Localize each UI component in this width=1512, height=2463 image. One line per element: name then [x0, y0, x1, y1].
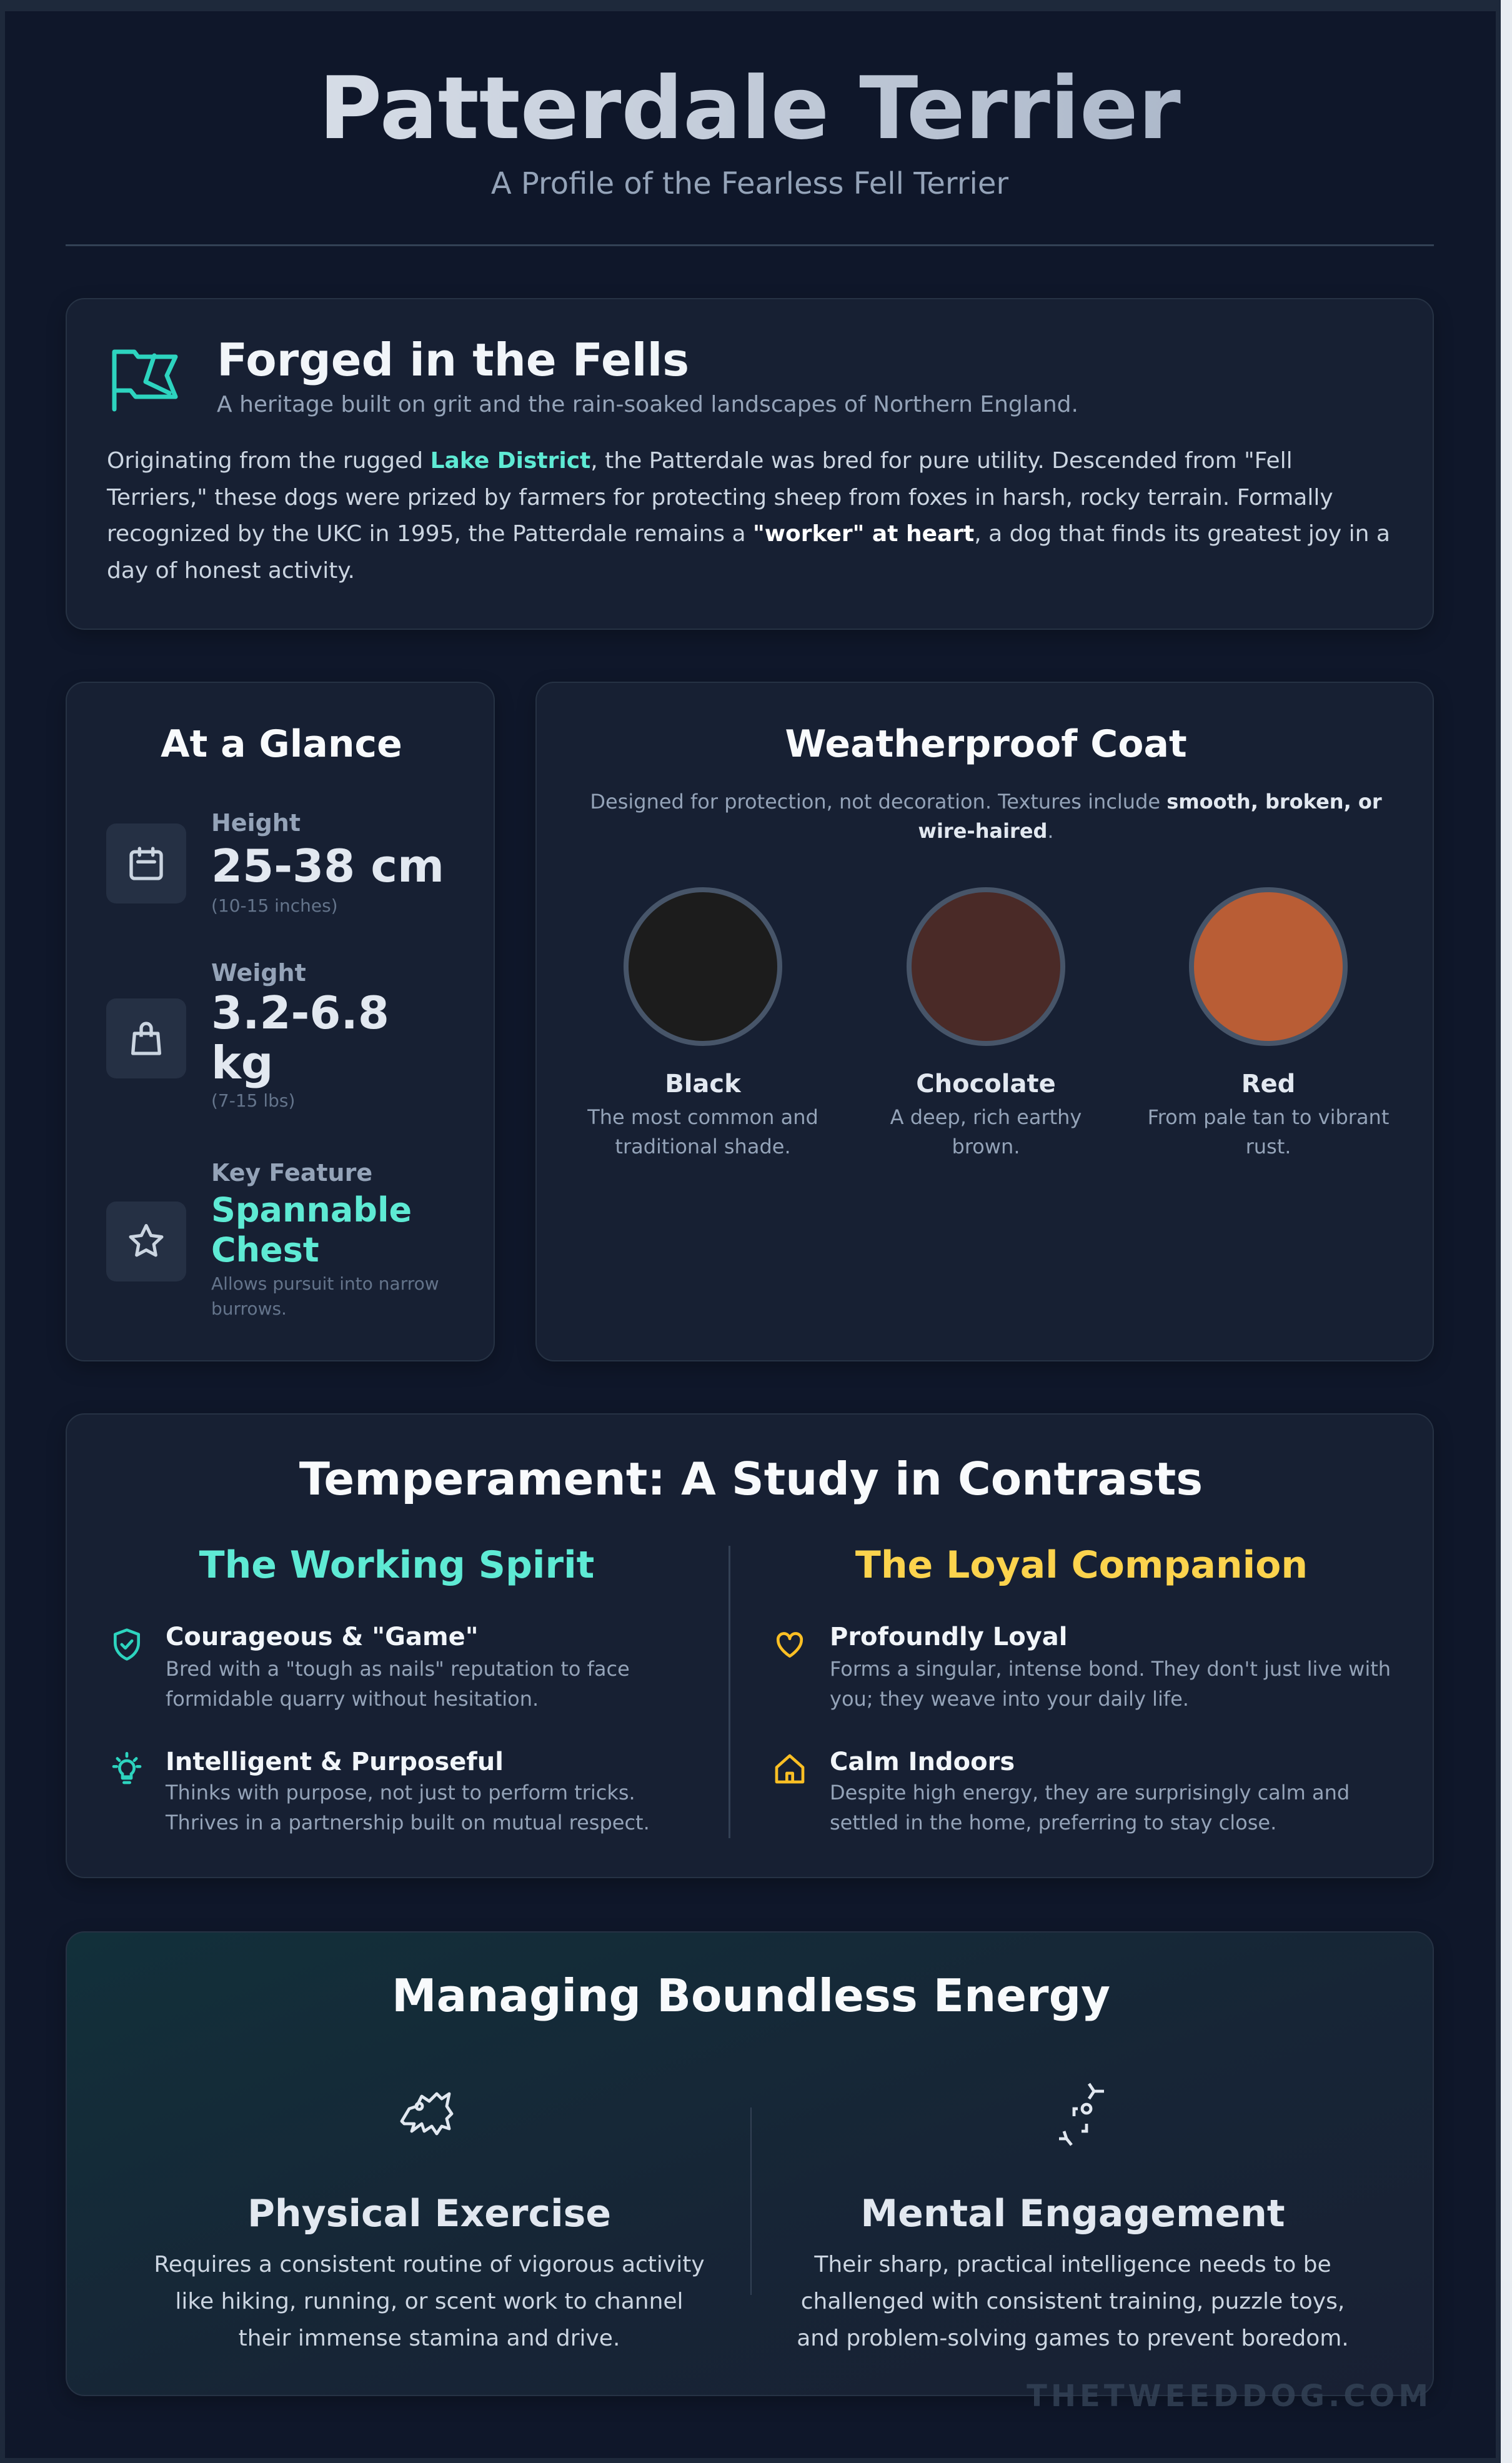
icon: shield — [114, 1628, 140, 1661]
stat: height: (10-15 inches) — [211, 895, 338, 916]
panel: forged in the fells — [66, 298, 1434, 630]
swatch: chocolate: brown. — [952, 1135, 1020, 1158]
stat: key feature: Key Feature — [211, 1159, 372, 1187]
icon: lightbulb — [112, 1752, 141, 1784]
swatch: black: The most common and — [587, 1105, 818, 1129]
column: mental engagement: Mental Engagement — [860, 2192, 1285, 2236]
icon: flag — [112, 350, 177, 411]
swatch: chocolate: Chocolate — [916, 1070, 1056, 1098]
column: physical exercise: Physical Exercise — [247, 2192, 611, 2236]
column: loyal companion: you; they weave into your daily life. — [830, 1687, 1189, 1711]
column: mental engagement — [797, 2083, 1349, 2351]
icon: heart — [776, 1632, 803, 1658]
swatch: black: traditional shade. — [615, 1135, 791, 1158]
swatch: red: From pale tan to vibrant — [1148, 1105, 1389, 1129]
column: loyal companion: Forms a singular, intense bond. They don't just live with — [830, 1657, 1391, 1681]
heading: Temperament: A Study in Contrasts — [299, 1453, 1203, 1505]
stat: weight: Weight — [211, 959, 306, 987]
column: mental engagement: and problem-solving games to prevent boredom. — [797, 2326, 1349, 2351]
icon: star — [106, 1202, 186, 1281]
column: working spirit: Thrives in a partnership built on mutual respect. — [166, 1811, 650, 1834]
heading: Forged in the Fells — [217, 334, 689, 386]
swatch: red: Red — [1241, 1070, 1295, 1098]
description — [590, 790, 1382, 843]
column: loyal companion: settled in the home, preferring to stay close. — [830, 1811, 1276, 1834]
column: mental engagement: challenged with consistent training, puzzle toys, — [801, 2289, 1345, 2314]
stat: weight: 3.2-6.8 — [211, 987, 389, 1039]
heading: At a Glance — [161, 722, 402, 766]
heading: Managing Boundless Energy — [392, 1969, 1110, 2022]
item: courageous: Courageous & "Game" — [166, 1623, 479, 1651]
swatch: red: rust. — [1246, 1135, 1291, 1158]
panel: at a glance — [66, 682, 495, 1361]
stat: height — [106, 809, 444, 916]
column: loyal companion: Despite high energy, they are surprisingly calm and — [830, 1781, 1350, 1804]
stat: key feature — [106, 1159, 439, 1319]
icon: house — [775, 1754, 805, 1783]
description: Designed for protection, not decoration. Textures include smooth, broken, or — [590, 790, 1382, 814]
panel: managing energy — [66, 1931, 1434, 2396]
description: wire-haired. — [918, 819, 1054, 843]
subheading: A heritage built on grit and the rain-soaked landscapes of Northern England. — [217, 392, 1078, 417]
swatch: red — [1148, 887, 1389, 1158]
watermark: THETWEEDDOG.COM — [1027, 2379, 1432, 2414]
icon: puzzle — [1059, 2083, 1104, 2146]
body text: Originating from the rugged Lake District, the Patterdale was bred for pure utility. Descended from "Fell — [107, 448, 1293, 474]
column: working spirit: formidable quarry without hesitation. — [166, 1687, 539, 1711]
stat: weight: kg — [211, 1037, 273, 1089]
item: calm: Calm Indoors — [830, 1748, 1015, 1776]
stat: height: Height — [211, 809, 301, 837]
swatch: chocolate: A deep, rich earthy — [890, 1105, 1082, 1129]
column: loyal companion — [775, 1543, 1391, 1834]
body text: recognized by the UKC in 1995, the Patterdale remains a "worker" at heart, a dog that finds its greatest joy in a — [107, 521, 1390, 547]
heading: Weatherproof Coat — [785, 722, 1187, 766]
column: physical exercise — [154, 2092, 705, 2351]
stat: height: 25-38 cm — [211, 840, 444, 892]
column: working spirit: Bred with a "tough as nails" reputation to face — [166, 1657, 630, 1681]
stat: key feature: Chest — [211, 1230, 319, 1270]
column: working spirit — [112, 1543, 650, 1834]
item: loyal: Profoundly Loyal — [830, 1623, 1067, 1651]
column: physical exercise: like hiking, running, or scent work to channel — [175, 2289, 684, 2314]
icon: bag — [106, 998, 186, 1078]
panel: weatherproof coat — [535, 682, 1434, 1361]
stat: weight — [106, 959, 389, 1111]
icon: calendar — [106, 823, 186, 903]
swatch: black — [587, 887, 818, 1158]
subheading: The Working Spirit — [199, 1543, 594, 1587]
panel: temperament — [66, 1413, 1434, 1878]
column: physical exercise: their immense stamina and drive. — [239, 2326, 620, 2351]
stat: weight: (7-15 lbs) — [211, 1090, 295, 1111]
body text: Terriers," these dogs were prized by farmers for protecting sheep from foxes in harsh, rocky terrain. Formally — [107, 485, 1333, 510]
column: mental engagement: Their sharp, practical intelligence needs to be — [814, 2252, 1331, 2277]
subtitle: A Profile of the Fearless Fell Terrier — [491, 166, 1008, 201]
item: intelligent: Intelligent & Purposeful — [166, 1748, 504, 1776]
title: Patterdale Terrier — [319, 58, 1181, 159]
icon: dog run — [400, 2092, 454, 2136]
body text — [106, 448, 1390, 584]
stat: key feature: burrows. — [211, 1298, 287, 1319]
stat: key feature: Spannable — [211, 1190, 412, 1230]
body text: day of honest activity. — [107, 557, 355, 584]
stat: key feature: Allows pursuit into narrow — [211, 1273, 439, 1294]
column: working spirit: Thinks with purpose, not just to perform tricks. — [166, 1781, 635, 1804]
swatch: chocolate — [890, 887, 1082, 1158]
title — [0, 59, 1500, 159]
swatch: black: Black — [665, 1070, 741, 1098]
column: physical exercise: Requires a consistent routine of vigorous activity — [154, 2252, 705, 2277]
subheading: The Loyal Companion — [855, 1543, 1308, 1587]
